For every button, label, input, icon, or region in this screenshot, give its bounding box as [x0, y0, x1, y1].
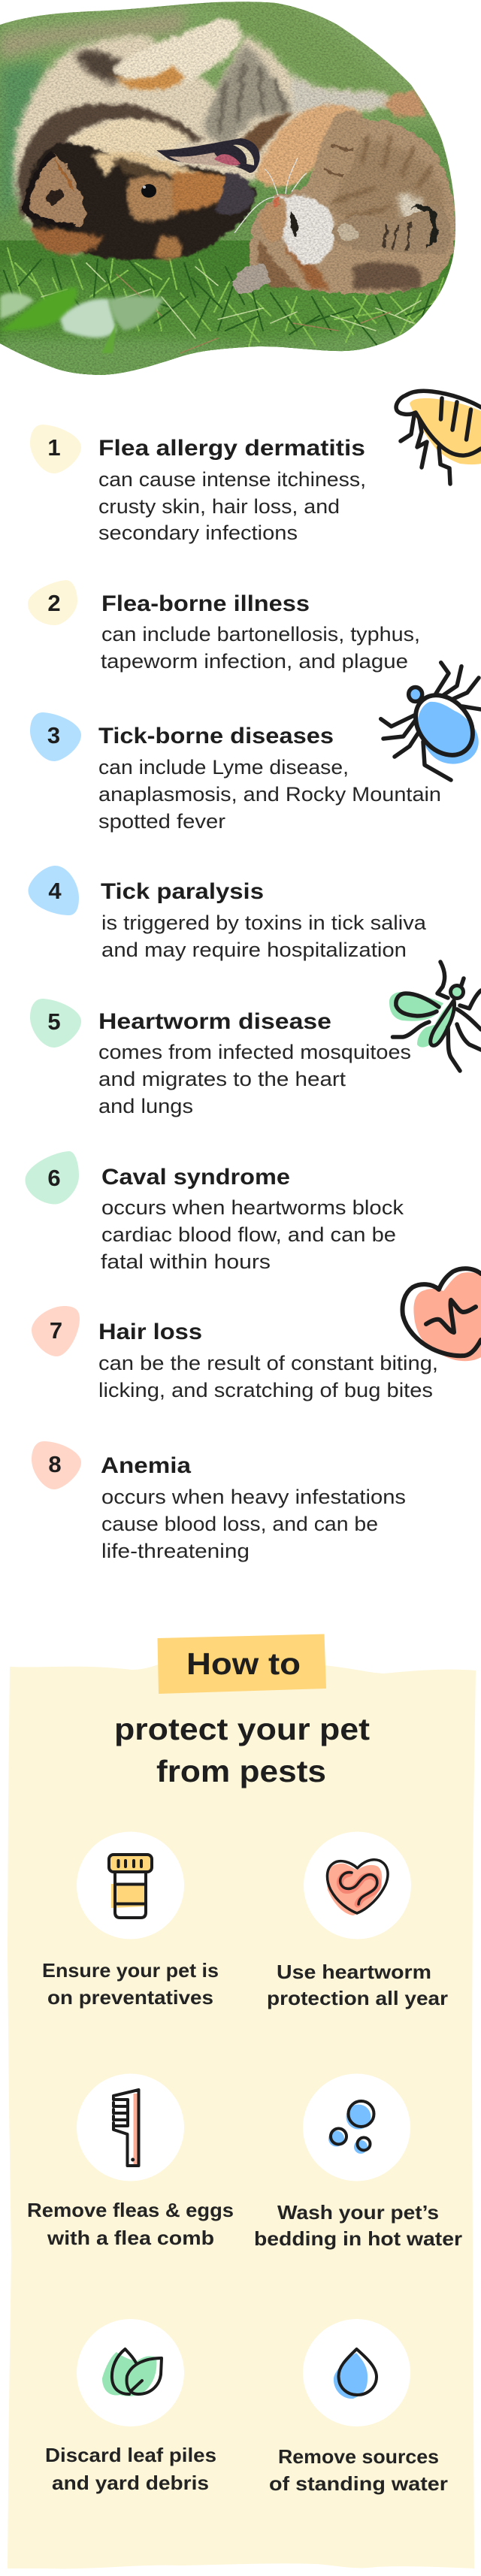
description [98, 1041, 411, 1117]
dog neck stripe [17, 103, 203, 218]
number badge 7 [32, 1306, 80, 1356]
description: can include bartonellosis, typhus, [101, 623, 420, 646]
label: on preventatives [47, 1986, 213, 2009]
risk 6: caval syndrome [26, 1151, 404, 1273]
number badge 8: 8 [48, 1451, 62, 1477]
cat muzzle [270, 195, 334, 264]
dog ear [25, 154, 86, 226]
label [45, 2444, 216, 2494]
description: is triggered by toxins in tick saliva [101, 912, 427, 934]
icon: mosquito [389, 962, 481, 1071]
number badge 5: 5 [47, 1008, 61, 1035]
number badge 1 [30, 425, 81, 473]
label: bedding in hot water [254, 2227, 462, 2250]
heading: Tick-borne diseases [98, 724, 334, 748]
number badge 2 [28, 580, 77, 625]
animals [14, 20, 455, 294]
cat foreleg [331, 210, 452, 254]
heading: Caval syndrome [101, 1165, 290, 1190]
label: Ensure your pet is [42, 1959, 219, 1982]
description: spotted fever [98, 810, 225, 833]
number badge 3: 3 [47, 722, 60, 748]
heading [114, 1712, 370, 1788]
icon: bubbles [303, 2074, 410, 2181]
description: crusty skin, hair loss, and [98, 495, 340, 518]
number badge 7: 7 [50, 1317, 62, 1344]
description: cause blood loss, and can be [101, 1513, 378, 1535]
description: secondary infections [98, 522, 298, 544]
dog body [14, 35, 392, 255]
heading: Tick paralysis [101, 879, 264, 904]
heading: Heartworm disease [98, 1009, 331, 1034]
tip: standing water [269, 2319, 448, 2495]
dog chest [69, 119, 189, 162]
description: and may require hospitalization [101, 939, 407, 961]
icon: medicine jar [77, 1832, 184, 1939]
description [98, 468, 366, 544]
number badge 8 [32, 1441, 81, 1489]
grass blades [4, 248, 443, 353]
label: Remove fleas & eggs [27, 2199, 234, 2221]
number badge 5 [30, 999, 81, 1048]
label [267, 1961, 448, 2009]
number badge 6 [26, 1151, 79, 1204]
dog face tan [128, 176, 177, 222]
description: can include Lyme disease, [98, 756, 349, 779]
description: comes from infected mosquitoes [98, 1041, 411, 1063]
dog eye [141, 184, 156, 198]
icon: leaves [77, 2319, 184, 2426]
description: cardiac blood flow, and can be [101, 1223, 396, 1246]
description: anaplasmosis, and Rocky Mountain [98, 783, 441, 806]
label: Wash your pet’s [277, 2201, 439, 2224]
label: Use heartworm [277, 1961, 431, 1983]
heading: protect your pet [114, 1712, 370, 1746]
label [254, 2201, 462, 2250]
description: can cause intense itchiness, [98, 468, 366, 491]
number badge 3 [30, 712, 81, 761]
cat ear [231, 263, 271, 294]
description [98, 756, 441, 833]
icon: comb [77, 2074, 184, 2181]
description: tapeworm infection, and plague [101, 650, 408, 673]
description: and migrates to the heart [98, 1068, 346, 1090]
heading: Flea allergy dermatitis [98, 436, 365, 461]
heading: Anemia [101, 1453, 191, 1478]
heading: Flea-borne illness [101, 591, 310, 616]
panel: how to protect your pet [8, 1634, 476, 2568]
heading tag [158, 1634, 326, 1694]
cat head stripes [258, 240, 301, 289]
description [101, 912, 427, 961]
dog hind paw [383, 91, 425, 116]
hero photo: dog and cat rolling in grass [0, 0, 481, 383]
label: and yard debris [52, 2472, 209, 2494]
icon: flea [396, 391, 481, 484]
description [101, 623, 420, 673]
description: life-threatening [101, 1540, 250, 1562]
description: and lungs [98, 1095, 193, 1117]
number badge 2: 2 [47, 590, 61, 616]
description [101, 1196, 404, 1273]
description: occurs when heavy infestations [101, 1486, 406, 1508]
tip: preventatives [42, 1832, 219, 2009]
dog lower cheek [32, 228, 104, 255]
description: can be the result of constant biting, [98, 1352, 438, 1374]
description: fatal within hours [101, 1250, 271, 1273]
dog forehead cream [92, 152, 201, 177]
icon: water drop [303, 2319, 410, 2426]
list panel: eight health risks [26, 391, 481, 1562]
description [98, 1352, 438, 1401]
dog head dark [27, 143, 256, 260]
panel background [8, 1664, 476, 2568]
whiskers [234, 158, 307, 233]
label: of standing water [269, 2472, 448, 2495]
heading: from pests [156, 1754, 326, 1788]
tip: flea comb [27, 2074, 234, 2249]
risk 4: tick paralysis [29, 866, 427, 961]
number badge 4: 4 [48, 878, 62, 904]
description: occurs when heartworms block [101, 1196, 404, 1219]
heading: Hair loss [98, 1320, 202, 1344]
dog raised leg [113, 20, 242, 89]
dog hip dark [75, 50, 132, 84]
icon: heart with pulse [403, 1268, 481, 1361]
label: protection all year [267, 1987, 448, 2009]
risk 3: tick-borne diseases [30, 712, 441, 833]
number badge 1: 1 [47, 434, 61, 461]
foreground leaves [0, 287, 77, 331]
label [27, 2199, 234, 2249]
risk 1: flea allergy dermatitis [30, 425, 366, 544]
dog muzzle orange [171, 172, 236, 214]
label [42, 1959, 219, 2009]
cat raised paw [313, 110, 364, 177]
risk 5: heartworm disease [30, 999, 411, 1117]
number badge 4 [29, 866, 79, 915]
dog mouth [156, 138, 260, 173]
risk 8: anemia [32, 1441, 406, 1562]
dog foreleg [256, 104, 362, 188]
label: Discard leaf piles [45, 2444, 216, 2466]
icon: tick [381, 663, 481, 780]
label [269, 2445, 448, 2495]
risk 7: hair loss [32, 1306, 438, 1401]
icon: heart with worm [304, 1832, 411, 1939]
description [101, 1486, 406, 1562]
cat body [250, 119, 455, 294]
heading tag: How to [186, 1646, 301, 1681]
dog belly shade [203, 45, 295, 147]
tip: wash bedding [254, 2074, 462, 2250]
description: licking, and scratching of bug bites [98, 1379, 433, 1401]
label: Remove sources [278, 2445, 439, 2468]
fine grain texture [0, 0, 481, 383]
label: with a flea comb [47, 2227, 214, 2249]
tip: heartworm protection [267, 1832, 448, 2009]
tip: leaf piles [45, 2319, 216, 2494]
risk 2: flea-borne illness [28, 580, 420, 673]
number badge 6: 6 [47, 1165, 61, 1191]
